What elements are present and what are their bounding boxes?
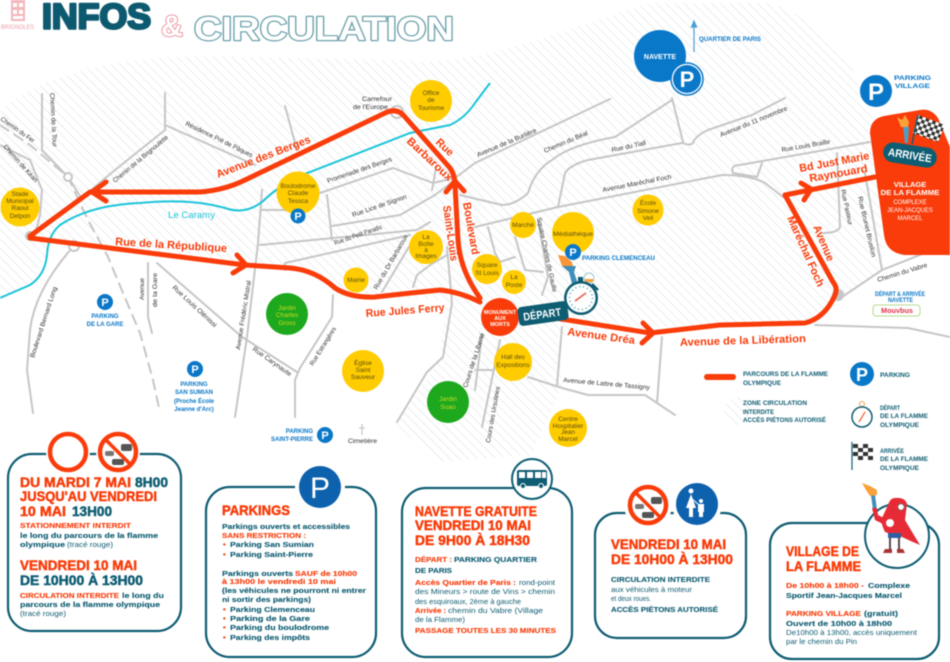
landmarks: yellow and green circles: Delpon: [10, 213, 31, 220]
street labels: black: Chemin de la Brignoulette: [112, 134, 170, 185]
text block: navette details: Accès Quartier de Paris :: [415, 578, 516, 587]
text block: navette details: rond-point: [519, 578, 555, 587]
parkings on map: [87, 21, 931, 443]
street labels: black: Rue Lice de Signon: [351, 194, 408, 219]
landmarks: yellow and green circles: Raoul: [12, 205, 29, 212]
icon: chequered flag: [912, 115, 945, 144]
street labels: black: Rue Estrangères: [309, 325, 338, 367]
text block: navette details: PARKING QUARTIER: [454, 555, 538, 564]
text block: sauf vendredi: Parking des impôts: [230, 633, 310, 642]
text block: village details: De 10h00 à 18h00 -: [786, 581, 865, 590]
text block: stationnement: 8H00: [135, 474, 168, 490]
street labels: black: Avenue Maréchal Foch: [602, 174, 672, 194]
landmarks: yellow and green circles: Square: [477, 262, 498, 269]
street labels: red: Saint-Louis: [440, 205, 460, 262]
text block: sauf vendredi: (les véhicules ne pourront ni entrer: [222, 586, 366, 595]
parking clemenceau: [565, 244, 655, 262]
parking clemenceau: PARKING CLEMENCEAU: [582, 256, 655, 262]
text block: sauf vendredi: à 13h00 le vendredi 10 mai: [222, 577, 336, 586]
street labels: black: Cours des Ursulines: [485, 385, 502, 443]
legend: départ: DE LA FLAMME: [880, 413, 929, 420]
landmarks: yellow and green circles: Jardin: [278, 305, 296, 312]
text block: sauf vendredi: Parking du boulodrome: [230, 623, 329, 632]
legend: départ: DÉPART: [880, 403, 900, 412]
navette départ & arrivée: [873, 290, 925, 316]
icon: stopwatch: [564, 273, 598, 315]
parking village: PARKING: [894, 76, 931, 82]
parking clemenceau: P: [569, 247, 577, 259]
landmarks: yellow and green circles: à: [424, 247, 428, 254]
arrivée pill: [882, 141, 938, 169]
street labels: red: Boulevard: [460, 201, 481, 256]
navette parking: P: [680, 67, 694, 92]
text block: village details: par le chemin du Pin: [786, 637, 857, 646]
icon: no parking ring: [46, 430, 90, 474]
street labels: black: Rue du Petit Paradis: [333, 224, 384, 247]
landmarks: yellow and green circles: Charles: [276, 312, 299, 319]
landmarks: yellow and green circles: Jardin: [439, 396, 457, 403]
parking saint-pierre: [271, 427, 333, 443]
landmarks: yellow and green circles: Mairie: [347, 277, 365, 284]
quartier de paris arrow: QUARTIER DE PARIS: [699, 37, 761, 43]
landmarks: yellow and green circles: Tessca: [288, 198, 308, 205]
landmarks: yellow and green circles: Simone: [637, 208, 659, 215]
parking village: [860, 75, 931, 107]
flame route: [30, 111, 875, 343]
legend: parking: [850, 362, 910, 386]
text block: navette details: DÉPART :: [415, 555, 452, 564]
landmarks: yellow and green circles: Expositions: [496, 362, 530, 369]
arrivée block: village de la flamme: COMPLEXE: [893, 200, 927, 206]
text block: sauf vendredi: •: [223, 605, 226, 614]
street labels: red: Rue: [433, 136, 456, 159]
arrivée block: village de la flamme: [870, 110, 950, 255]
text block: stationnement: (tracé rouge): [67, 540, 113, 549]
text block: circulation: DE 10H00 À 13H00: [20, 572, 143, 588]
street labels: black: Cours de la Liberté: [462, 332, 487, 389]
monument aux morts: [481, 298, 519, 336]
landmarks: yellow and green circles: Hospitalier: [553, 423, 584, 430]
quartier de paris arrow: [692, 21, 761, 52]
text block: sauf vendredi: SAUF de 10h00: [295, 569, 357, 578]
arrows: [92, 182, 106, 201]
text block: sauf vendredi: •: [223, 623, 226, 632]
parking san sumian: SAN SUMIAN: [175, 390, 213, 396]
street labels: black: Chemin du Vabre: [877, 262, 929, 284]
legend: arrivée: OLYMPIQUE: [880, 465, 920, 472]
logo: Brignoles: BRIGNOLES: [1, 24, 35, 31]
parking san sumian: (Proche École: [174, 397, 215, 405]
text block: stationnement: DU MARDI 7 MAI: [20, 474, 131, 490]
landmarks: yellow and green circles: [0, 80, 664, 447]
street labels: black: Chemin de la Tour: [48, 93, 58, 148]
legend: flame route: OLYMPIQUE: [743, 380, 782, 387]
text block: sans restriction: SANS RESTRICTION :: [222, 531, 306, 540]
street labels: black: Rue Brunet Bruslon: [856, 196, 877, 258]
text block: circulation: le long du: [122, 591, 164, 600]
parking de la gare: PARKING: [91, 314, 119, 320]
icon: no vehicles: [624, 481, 672, 529]
legend: parking: PARKING: [880, 372, 910, 379]
landmarks: yellow and green circles: Claude: [288, 190, 309, 197]
départ label: DÉPART: [522, 306, 562, 324]
street labels: red: Barbaroux: [404, 135, 455, 184]
text block: village details: Ouvert de 10h00 à 18h00: [786, 619, 892, 628]
heading: [786, 543, 861, 574]
heading: LA FLAMME: [786, 558, 861, 574]
text block: sauf vendredi: •: [223, 633, 226, 642]
street labels: red: Rue de la République: [115, 236, 227, 255]
street labels: black: [0, 93, 929, 445]
legend: restricted zone: [724, 397, 827, 425]
text block: circulation: VENDREDI 10 MAI: [20, 557, 137, 573]
text block: navette details: DE PARIS: [415, 566, 452, 575]
landmarks: yellow and green circles: Office: [423, 90, 440, 97]
text block: circulation: [20, 557, 164, 618]
icon: parking: [295, 462, 345, 512]
roads: [0, 93, 950, 427]
text block: sans restriction: Parking Saint-Pierre: [230, 550, 313, 559]
parking boulodrome: P: [294, 211, 302, 223]
legend: flame route: [707, 371, 829, 387]
landmarks: yellow and green circles: Saint: [356, 367, 371, 374]
parking de la gare: P: [101, 297, 109, 309]
landmarks: yellow and green circles: Soao: [440, 404, 456, 411]
text block: stationnement: 10 MAI: [20, 503, 66, 519]
landmarks: yellow and green circles: Tourisme: [418, 105, 445, 112]
text block: stationnement: [20, 474, 168, 549]
street labels: red: Avenue Dréa: [567, 326, 636, 347]
street labels: black: Rue Carynaute: [251, 346, 293, 378]
heading: PARKINGS: [222, 502, 290, 518]
landmarks: yellow and green circles: La: [510, 274, 518, 281]
text block: sans restriction: [222, 522, 350, 559]
legend: départ: OLYMPIQUE: [880, 422, 920, 429]
landmarks: yellow and green circles: Boîte: [418, 241, 434, 248]
navette départ & arrivée: DÉPART & ARRIVÉE: [875, 290, 925, 298]
legend: restricted zone: ACCÈS PIÉTONS AUTORISÉ: [743, 415, 827, 424]
text block: circulation interdite: CIRCULATION INTERDITE: [611, 575, 710, 584]
text block: circulation interdite: DE 10H00 À 13H00: [611, 551, 733, 567]
text block: stationnement: 13H00: [72, 503, 112, 519]
street labels: black: Boulevard Bernard Long: [29, 286, 59, 359]
parking san sumian: PARKING: [180, 382, 208, 388]
text block: navette details: des esquiroaux, 2ème à gauche: [415, 597, 521, 606]
legend: restricted zone: INTERDITE: [743, 409, 775, 416]
street labels: black: de l'Europe: [353, 104, 388, 111]
map: [0, 3, 950, 462]
text block: sauf vendredi: •: [223, 614, 226, 623]
heading: [415, 503, 537, 548]
parking boulodrome: [290, 208, 306, 224]
landmarks: yellow and green circles: Images: [415, 253, 437, 260]
river: Le Caramy: [0, 83, 490, 298]
legend: départ: [852, 402, 929, 429]
street labels: black: Avenue de la Burlière: [476, 127, 538, 159]
street labels: black: Cimetière: [348, 438, 377, 445]
text block: sauf vendredi: Parkings ouverts: [222, 569, 293, 578]
legend: arrivée: DE LA FLAMME: [880, 456, 929, 463]
icon: no vehicles: [96, 430, 140, 474]
icon: parking: P: [310, 472, 330, 505]
street labels: black: Avenue de Lattre de Tassigny: [563, 377, 651, 392]
legend: flame route: PARCOURS DE LA FLAMME: [743, 371, 829, 378]
landmarks: yellow and green circles: Marché: [512, 222, 534, 229]
text block: navette details: de la Flamme): [415, 615, 465, 624]
landmarks: yellow and green circles: Hall des: [501, 354, 525, 361]
street labels: red: [115, 134, 870, 349]
legend: [707, 362, 929, 472]
text block: navette details: Arrivée :: [415, 606, 446, 615]
panel: village de la flamme: [770, 483, 939, 659]
street labels: red: Avenue: [810, 223, 836, 263]
landmarks: yellow and green circles: Boulodrome: [280, 183, 316, 190]
landmarks: yellow and green circles: Gross: [278, 320, 296, 327]
navette parking: NAVETTE: [644, 54, 676, 61]
text block: stationnement: olympique: [20, 540, 65, 549]
heading: VILLAGE DE: [786, 543, 859, 559]
landmarks: yellow and green circles: Veil: [643, 215, 654, 222]
text block: circulation interdite: et deux roues.: [611, 594, 651, 603]
street labels: black: Avenue: [139, 278, 146, 300]
parking san sumian: Jeanne d'Arc): [174, 407, 214, 413]
legend: restricted zone: ZONE CIRCULATION: [743, 400, 807, 407]
départ marker with torch and stopwatch: [517, 255, 598, 326]
text block: village details: Complexe: [868, 581, 910, 590]
legend: parking: P: [856, 365, 868, 385]
text block: sauf vendredi: Parking de la Gare: [230, 614, 310, 623]
street labels: black: Rue Louis Braille: [781, 139, 831, 154]
arrivée block: village de la flamme: JEAN-JACQUES: [887, 208, 933, 214]
text block: circulation interdite: VENDREDI 10 MAI: [611, 536, 726, 552]
text block: village details: (gratuit): [864, 609, 899, 618]
street labels: red: Avenue de la Libération: [680, 333, 806, 349]
panel: navette gratuite: [402, 459, 572, 657]
street labels: black: Rue du Dr Barbaroux: [373, 233, 410, 291]
mascot with torch: [862, 483, 929, 568]
heading: DE 9H00 À 18H30: [415, 532, 530, 548]
text block: circulation interdite: aux véhicules à moteur: [611, 585, 693, 594]
street labels: black: de la Gare: [152, 273, 159, 307]
landmarks: yellow and green circles: Médiathèque: [553, 231, 593, 238]
text block: village details: [786, 581, 917, 646]
street labels: black: Chemin du Fer: [0, 116, 36, 145]
landmarks: yellow and green circles: de: [427, 97, 435, 104]
parking san sumian: [174, 361, 215, 413]
parking saint-pierre: PARKING: [286, 429, 313, 435]
heading: NAVETTE GRATUITE: [415, 503, 537, 519]
legend: arrivée: ARRIVÉE: [880, 446, 905, 455]
text block: circulation: parcours de la flamme olympique: [20, 600, 160, 609]
monument aux morts: MONUMENT: [484, 310, 517, 316]
text block: sans restriction: •: [223, 550, 226, 559]
parking saint-pierre: P: [321, 430, 329, 442]
street labels: black: Avenue du 11 novembre: [719, 105, 789, 139]
navette départ & arrivée: NAVETTE: [888, 298, 913, 304]
icon: bus: [512, 459, 552, 499]
text block: circulation: CIRCULATION INTERDITE: [20, 591, 119, 600]
logo: Brignoles: [1, 0, 35, 31]
text block: circulation interdite: ACCÈS PIÉTONS AUTORISÉ: [611, 605, 718, 614]
legend: arrivée: [852, 442, 929, 472]
parking saint-pierre: SAINT-PIERRE: [271, 437, 313, 443]
text block: sans restriction: Parkings ouverts et accessibles: [222, 522, 350, 531]
heading: VENDREDI 10 MAI: [415, 517, 531, 533]
landmarks: yellow and green circles: Jean: [561, 429, 575, 436]
arrivée block: village de la flamme: DE LA FLAMME: [880, 188, 940, 197]
monument aux morts: MORTS: [490, 322, 510, 328]
parking village: VILLAGE: [895, 84, 930, 90]
landmarks: yellow and green circles: Centre: [558, 416, 578, 423]
street labels: black: Rue Pasteur: [839, 189, 854, 226]
text block: stationnement: JUSQU'AU VENDREDI: [20, 488, 157, 504]
text block: sans restriction: Parking San Sumian: [230, 540, 314, 549]
text block: navette details: chemin du Vabre (Village: [448, 606, 543, 615]
title: [42, 0, 454, 47]
street labels: red: Maréchal Foch: [784, 214, 826, 289]
landmarks: yellow and green circles: Municipal: [6, 198, 34, 205]
text block: sauf vendredi: ni sortir des parkings): [222, 595, 312, 604]
landmarks: yellow and green circles: École: [640, 198, 657, 207]
text block: navette details: des Mineurs > route de Vins > chemin: [415, 587, 555, 596]
text block: sauf vendredi: [222, 569, 366, 642]
text block: circulation: (tracé rouge): [20, 609, 66, 618]
text block: stationnement: le long du parcours de la flamme: [20, 531, 158, 540]
street labels: black: Square Charles de Gaulle: [535, 217, 558, 293]
street labels: black: Rue Louis Olénissi: [171, 284, 218, 329]
street labels: red: Avenue des Berges: [215, 134, 312, 181]
text block: village details: PARKING VILLAGE: [786, 609, 861, 618]
street labels: black: Carrefour: [362, 96, 393, 103]
panel: parkings: [206, 462, 376, 657]
street labels: red: Rue Jules Ferry: [365, 302, 446, 320]
text block: navette details: [415, 555, 556, 635]
street labels: black: Promenade des Berges: [326, 156, 394, 185]
text block: navette details: PASSAGE TOUTES LES 30 MINUTES: [415, 626, 556, 635]
landmarks: yellow and green circles: Poste: [506, 282, 523, 289]
street labels: black: Chemin de Kéan: [2, 144, 39, 184]
arrivée pill: ARRIVÉE: [887, 146, 933, 165]
arrivée block: village de la flamme: MARCEL: [897, 216, 923, 222]
parking de la gare: [87, 294, 123, 328]
landmarks: yellow and green circles: Église: [354, 358, 372, 367]
parking village: P: [868, 79, 884, 106]
navette départ & arrivée: Mouvbus: [881, 308, 913, 315]
street labels: red: Bd Just Marie: [798, 150, 870, 175]
street labels: black: Résidence Pré de Pâques: [184, 121, 254, 160]
navette parking: [634, 30, 703, 95]
river label: Le Caramy: [168, 210, 215, 221]
zone circulation interdite hatching: [0, 3, 884, 462]
text block: stationnement: STATIONNEMENT INTERDIT: [20, 521, 131, 530]
landmarks: yellow and green circles: St Louis: [475, 270, 499, 277]
icon: pedestrians: [672, 479, 722, 529]
text block: village details: Sportif Jean-Jacques Marcel: [786, 591, 902, 600]
landmarks: yellow and green circles: Sauveur: [351, 374, 376, 381]
text block: sans restriction: •: [223, 540, 226, 549]
street labels: black: Avenue Frédéric Mistral: [235, 280, 253, 350]
street labels: black: Chemin du Béal: [543, 130, 590, 155]
icon: torch: [897, 115, 909, 143]
street labels: black: Rue du Tiall: [611, 140, 647, 154]
title: CIRCULATION: [194, 10, 454, 47]
arrivée block: village de la flamme: VILLAGE: [894, 180, 926, 189]
parking de la gare: DE LA GARE: [87, 322, 123, 328]
text block: circulation interdite: [611, 536, 733, 614]
text block: village details: De10h00 à 13h00, accès uniquement: [786, 628, 917, 637]
panel: stationnement et circulation: [8, 430, 181, 631]
parking san sumian: P: [191, 364, 199, 376]
street labels: red: Raynouard: [808, 163, 869, 185]
landmarks: yellow and green circles: La: [422, 234, 430, 241]
panel: circulation interdite: [595, 479, 746, 638]
landmarks: yellow and green circles: Marcel: [558, 436, 578, 443]
title: &: [161, 10, 183, 43]
monument aux morts: AUX: [494, 316, 506, 322]
icon: torch: [558, 255, 578, 284]
landmarks: yellow and green circles: Stade: [12, 191, 29, 198]
text block: sauf vendredi: Parking Clemenceau: [230, 605, 315, 614]
